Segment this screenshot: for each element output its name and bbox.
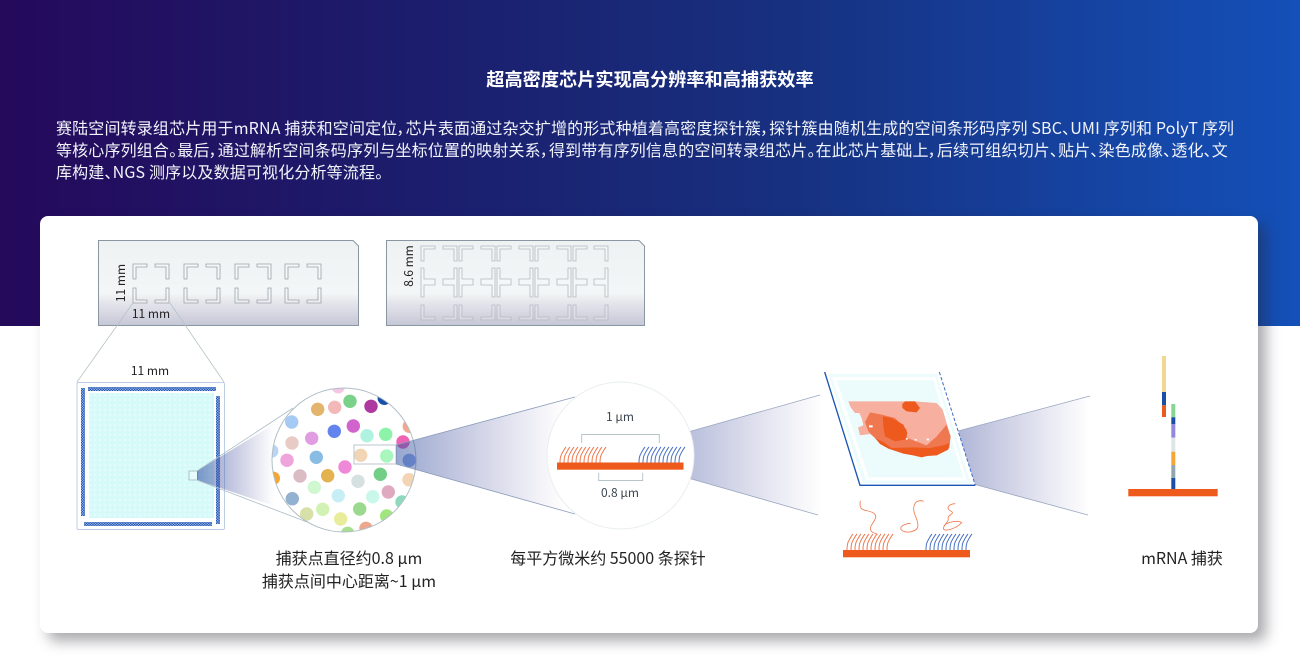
caption: mRNA capture: mRNA 捕获	[1141, 545, 1223, 569]
zoom cone 4	[958, 396, 1090, 515]
substrate bar	[557, 462, 684, 470]
bead selection box	[354, 445, 396, 464]
free mRNA segment	[1162, 356, 1166, 417]
blue probe cluster	[639, 447, 685, 463]
caption: bead size: 捕获点直径约0.8 µm	[276, 545, 422, 569]
zoom cone 1 edge lines	[197, 408, 307, 522]
chip 1 height label: 11 mm	[112, 264, 129, 302]
header band	[0, 0, 1300, 326]
caption: probe density: 每平方微米约 55000 条探针	[510, 545, 706, 569]
capture area width label: 11 mm	[131, 362, 169, 379]
0.8 um bracket	[599, 473, 643, 480]
0.8 um label: 0.8 μm	[601, 484, 639, 501]
zoom lines from chip to capture area	[77, 303, 224, 382]
1 um label: 1 μm	[606, 408, 634, 425]
probe magnified circle	[547, 382, 694, 529]
intro text block: 库构建、NGS 测序以及数据可视化分析等流程。	[56, 159, 383, 183]
zoom cone 1	[197, 424, 274, 506]
caption: bead size	[262, 545, 436, 592]
intro text block: 等核心序列组合。最后，通过解析空间条码序列与坐标位置的映射关系，得到带有序列信息的空间转录组芯片。在此芯片基础上，后续可组织切片、贴片、染色成像、透化、文	[56, 137, 1228, 161]
zoom cone 3	[688, 395, 820, 515]
chip 1 width label: 11 mm	[132, 305, 170, 322]
orange probe cluster	[560, 447, 606, 463]
tissue section	[848, 401, 950, 456]
capture beads	[272, 388, 416, 532]
tissue on chip	[825, 372, 975, 485]
title: 超高密度芯片实现高分辨率和高捕获效率	[486, 66, 814, 92]
1 um bracket	[582, 434, 659, 443]
chip 1: 11 mm slide	[98, 240, 358, 326]
bead magnified circle	[272, 388, 416, 532]
chip 2 capture-area brackets	[421, 246, 608, 320]
caption: bead size: 捕获点间中心距离~1 µm	[262, 568, 436, 592]
substrate bar	[843, 550, 970, 557]
substrate bar	[1128, 489, 1218, 496]
orange probe cluster	[847, 534, 893, 550]
mRNA capture bars	[1128, 356, 1218, 496]
chip 2: 8.6 mm slide	[386, 240, 644, 326]
main diagram	[76, 240, 1222, 590]
intro text block	[56, 115, 1234, 183]
mRNA strands	[860, 501, 962, 535]
zoom cone 2	[396, 397, 575, 514]
chip 1 capture-area brackets	[133, 264, 321, 303]
capture probe segment	[1171, 404, 1175, 489]
white card panel	[40, 216, 1258, 633]
capture area detail	[77, 382, 224, 530]
chip 2 size label: 8.6 mm	[400, 245, 417, 287]
intro text block: 赛陆空间转录组芯片用于mRNA 捕获和空间定位，芯片表面通过杂交扩增的形式种植着高密度探针簇，探针簇由随机生成的空间条形码序列 SBC、UMI 序列和 PolyT 序列	[56, 115, 1234, 139]
captured strands on probes	[843, 501, 972, 557]
blue probe cluster	[926, 534, 972, 550]
